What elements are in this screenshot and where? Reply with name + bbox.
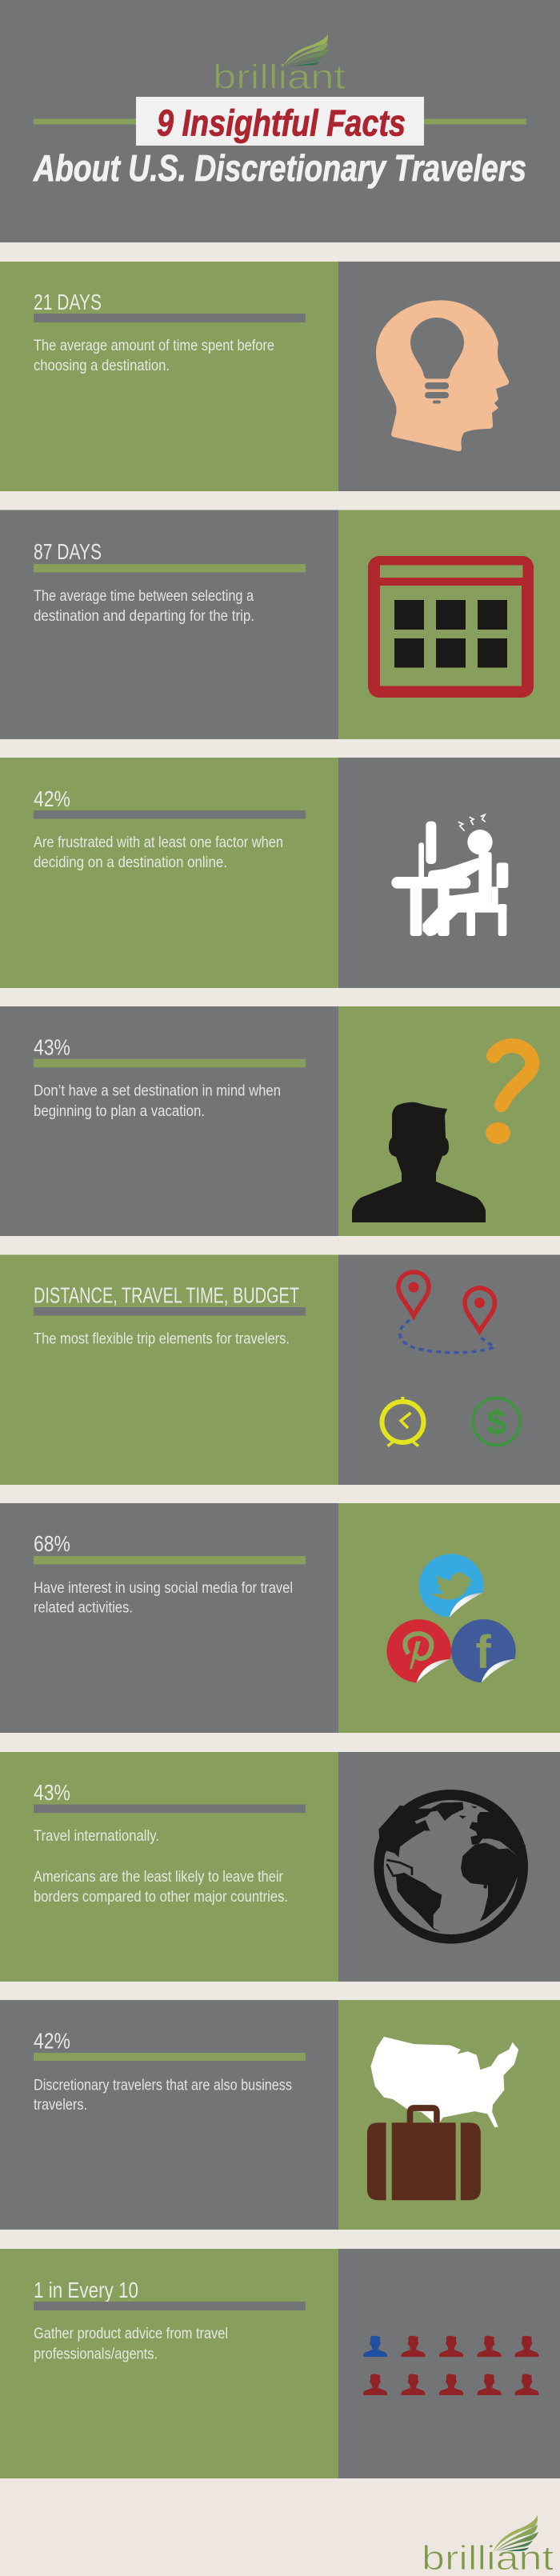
- stat description: travelers.: [34, 2096, 87, 2114]
- stat bar: [34, 1307, 306, 1315]
- icon: footer feather logo: [493, 2515, 538, 2553]
- icon: twitter sticker: [419, 1554, 483, 1618]
- panel: header: [0, 0, 560, 242]
- stat bar: [34, 1805, 306, 1813]
- stat heading: 1 in Every 10: [34, 2278, 138, 2302]
- stat description: [34, 337, 274, 374]
- stat description: Are frustrated with at least one factor when: [34, 834, 283, 851]
- stat heading: 87 DAYS: [34, 539, 102, 564]
- stat heading: DISTANCE, TRAVEL TIME, BUDGET: [34, 1283, 299, 1307]
- stat bar: [34, 314, 306, 322]
- stat bar: [34, 564, 306, 573]
- icon: frustrated person at desk: [391, 814, 508, 936]
- stat description: professionals/agents.: [34, 2346, 158, 2363]
- stat description: Americans are the least likely to leave their: [34, 1868, 283, 1886]
- icon: route with two pins: [398, 1272, 494, 1353]
- stat description: [34, 2077, 292, 2114]
- stat description: deciding on a destination online.: [34, 854, 227, 871]
- stat description: [34, 587, 254, 625]
- panel: 42% business: [0, 2000, 560, 2230]
- stat bar: [34, 810, 306, 819]
- stat heading: 43%: [34, 1035, 70, 1059]
- stat description: Gather product advice from travel: [34, 2325, 228, 2342]
- stat bar: [34, 2053, 306, 2061]
- stat description: Don’t have a set destination in mind when: [34, 1082, 281, 1099]
- panel: flexible elements: [0, 1254, 560, 1485]
- title line 1: 9 Insightful Facts: [157, 102, 406, 144]
- stat heading: 42%: [34, 2029, 70, 2054]
- icon: dollar coin: [473, 1398, 520, 1445]
- icon: silhouette: [352, 1102, 486, 1222]
- panel: 43% no destination: [0, 1006, 560, 1236]
- icon: facebook sticker: [451, 1619, 516, 1682]
- stat heading: 21 DAYS: [34, 290, 102, 314]
- stat description: related activities.: [34, 1599, 133, 1617]
- stat heading: 68%: [34, 1531, 70, 1556]
- stat description: [34, 1579, 293, 1617]
- icon: pinterest sticker: [386, 1619, 451, 1682]
- panel: 87 days: [0, 510, 560, 739]
- icon: people grid: [363, 2336, 539, 2395]
- stat bar: [34, 2302, 306, 2310]
- stat description: The average amount of time spent before: [34, 337, 274, 354]
- panel: footer: [0, 2478, 560, 2576]
- stat description: The average time between selecting a: [34, 587, 254, 605]
- panel: 42% frustrated: [0, 758, 560, 988]
- stat description: Discretionary travelers that are also business: [34, 2077, 292, 2094]
- icon: brilliant feather logo: [283, 34, 329, 66]
- title rule: [34, 118, 526, 125]
- logo wordmark: brilliant: [213, 58, 346, 97]
- stat bar: [34, 1556, 306, 1565]
- stat bar: [34, 1059, 306, 1067]
- icon: globe: [374, 1790, 528, 1944]
- icon: calendar: [368, 556, 534, 698]
- panel: 68% social media: [0, 1503, 560, 1733]
- panel: 21 days: [0, 262, 560, 491]
- stat description: [34, 2325, 228, 2363]
- icon: USA map and suitcase: [367, 2037, 518, 2200]
- stat description: [34, 1827, 288, 1906]
- icon: facebook sticker: f: [475, 1626, 491, 1678]
- icon: question mark: [486, 1046, 532, 1144]
- icon: dollar coin: $: [486, 1403, 506, 1442]
- stat description: Travel internationally.: [34, 1827, 159, 1845]
- stat description: borders compared to other major countries.: [34, 1888, 288, 1906]
- stat description: [34, 834, 283, 871]
- stat description: beginning to plan a vacation.: [34, 1102, 205, 1120]
- stat description: destination and departing for the trip.: [34, 607, 254, 625]
- stat heading: 42%: [34, 786, 70, 811]
- icon: alarm clock: [382, 1397, 424, 1446]
- panel: 1 in every 10: [0, 2249, 560, 2478]
- title box: [136, 97, 424, 146]
- stat description: [34, 1082, 281, 1120]
- icon: head with light bulb: [376, 300, 509, 451]
- stat heading: 43%: [34, 1780, 70, 1805]
- stat description: The most flexible trip elements for travelers.: [34, 1330, 290, 1347]
- stat description: choosing a destination.: [34, 357, 170, 374]
- stat description: Have interest in using social media for travel: [34, 1579, 293, 1597]
- panel: 43% international: [0, 1752, 560, 1982]
